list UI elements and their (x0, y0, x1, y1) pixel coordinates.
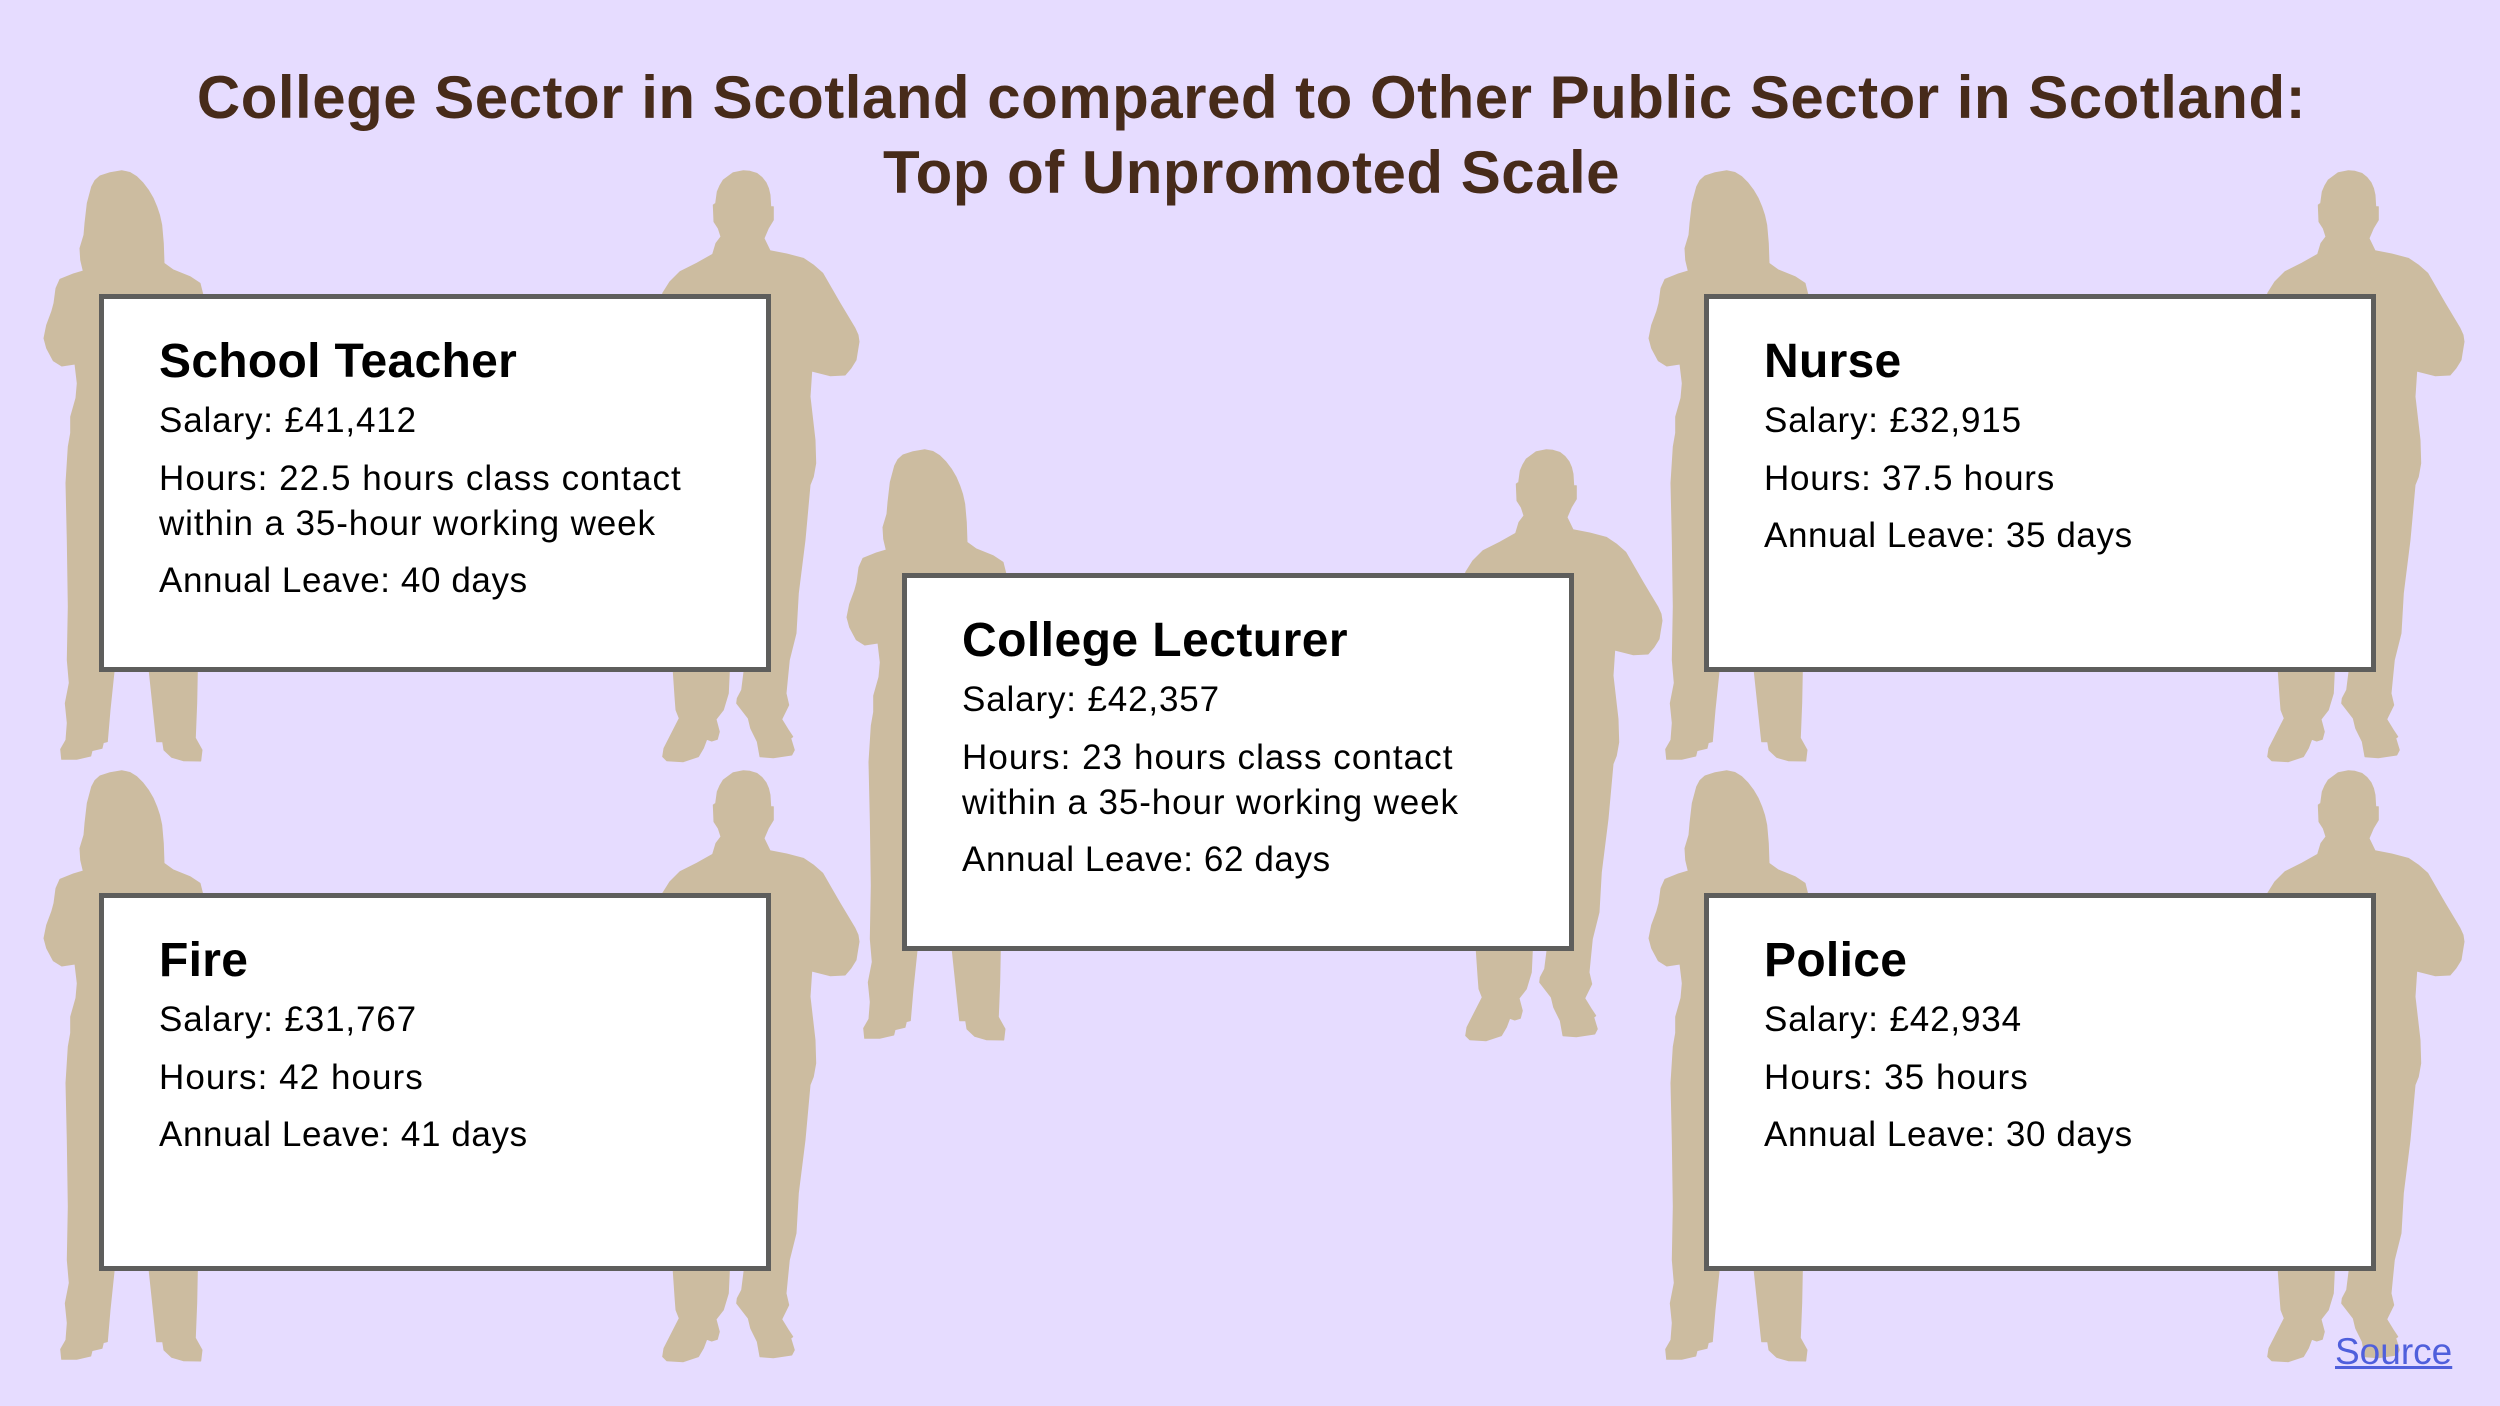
panel: police (1704, 893, 2376, 1271)
hours: Hours: 37.5 hours (1764, 459, 2055, 498)
panel: college lecturer (902, 573, 1574, 951)
heading: fire: Fire (159, 934, 248, 986)
annual leave: Annual Leave: 40 days (159, 561, 528, 600)
figures: fire pair (44, 771, 859, 1362)
heading: nurse: Nurse (1764, 334, 1902, 388)
title (197, 64, 2306, 206)
annual leave: Annual Leave: 41 days (159, 1115, 528, 1154)
salary: Salary: £42,357 (962, 680, 1220, 719)
annual leave: Annual Leave: 30 days (1764, 1115, 2133, 1154)
heading: school teacher: School Teacher (159, 334, 517, 388)
salary: Salary: £32,915 (1764, 401, 2022, 440)
figures: school teacher pair (44, 171, 859, 762)
annual leave: Annual Leave: 62 days (962, 840, 1331, 879)
figures: college lecturer pair (847, 450, 1662, 1041)
hours: Hours: 23 hours class contact (962, 738, 1454, 777)
hours (159, 459, 682, 543)
panel: fire (99, 893, 771, 1271)
heading: police: Police (1764, 934, 1907, 986)
hours: within a 35-hour working week (962, 783, 1459, 822)
annual leave: Annual Leave: 35 days (1764, 516, 2133, 555)
heading: college lecturer: College Lecturer (962, 614, 1348, 666)
title: College Sector in Scotland compared to Other Public Sector in Scotland: (197, 64, 2306, 131)
panel: school teacher (99, 294, 771, 672)
hours: Hours: 22.5 hours class contact (159, 459, 682, 498)
salary: Salary: £42,934 (1764, 1000, 2022, 1039)
hours: Hours: 42 hours (159, 1058, 424, 1097)
hours: Hours: 35 hours (1764, 1058, 2029, 1097)
salary: Salary: £41,412 (159, 401, 417, 440)
hours: within a 35-hour working week (159, 504, 656, 543)
title: Top of Unpromoted Scale (883, 139, 1620, 206)
salary: Salary: £31,767 (159, 1000, 417, 1039)
panel: nurse (1704, 294, 2376, 672)
hours (962, 738, 1459, 822)
figures: nurse pair (1649, 171, 2464, 762)
figures: police pair (1649, 771, 2464, 1362)
source link: Source (2335, 1331, 2452, 1372)
